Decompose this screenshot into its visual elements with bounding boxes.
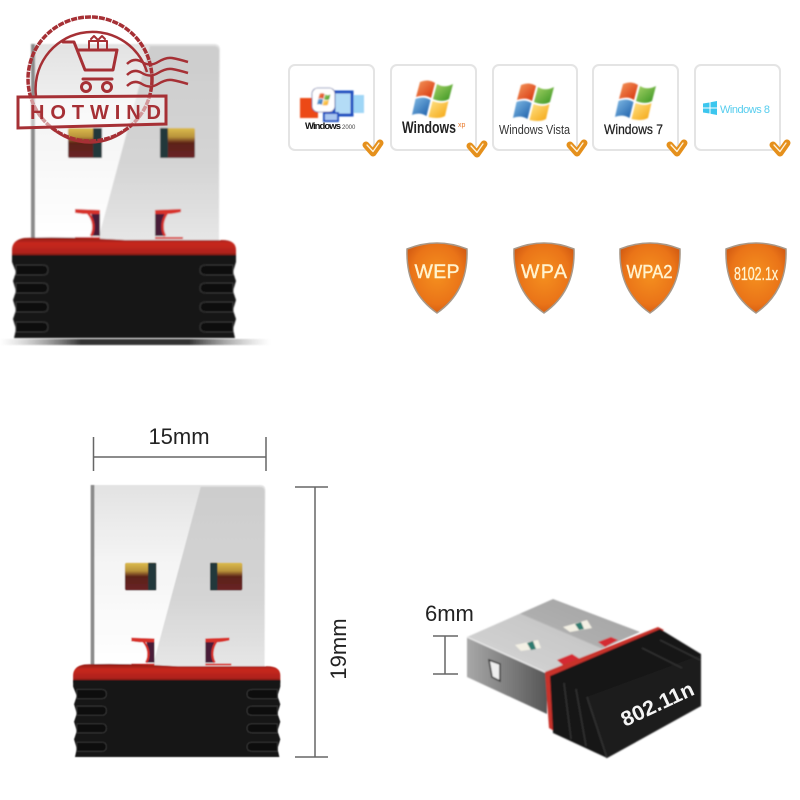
postmark waves — [127, 58, 188, 86]
usb dongle angled view — [467, 599, 701, 758]
side slot — [489, 660, 500, 681]
plug top face — [467, 599, 640, 673]
contact windows — [515, 620, 592, 651]
check mark — [570, 143, 584, 153]
check mark — [670, 143, 684, 153]
icon: shopping cart — [63, 36, 117, 92]
model label 802.11n: 802.11n — [617, 678, 698, 732]
plug side face — [467, 637, 547, 714]
red collar — [545, 627, 664, 732]
top edge highlight — [467, 637, 547, 673]
security badge: wpa2 — [620, 243, 680, 315]
stamp ring — [28, 17, 152, 143]
red clips — [557, 637, 618, 666]
check mark — [366, 143, 380, 153]
width dimension: 15mm — [94, 424, 266, 471]
black housing — [550, 629, 701, 758]
watermark stamp: hotwind — [18, 17, 188, 143]
security badge: wep: WEP — [414, 261, 460, 283]
check mark — [773, 143, 787, 153]
hotwind label: HOTWIND — [30, 102, 161, 124]
hotwind label — [18, 96, 166, 128]
check mark — [470, 144, 484, 154]
os compatibility: windows vista — [493, 65, 577, 150]
height dimension: 19mm: 19mm — [326, 618, 351, 680]
security badge: wpa2: WPA2 — [626, 262, 672, 282]
security badge: wpa: WPA — [521, 261, 567, 283]
usb dongle front view (small) — [73, 485, 280, 757]
os compatibility: windows 7: Windows 7 — [604, 121, 663, 137]
black body — [12, 255, 236, 338]
os compatibility: windows vista: Windows Vista — [499, 122, 571, 137]
red clip right — [155, 209, 183, 239]
metal plug — [31, 44, 220, 240]
height dimension: 19mm — [295, 487, 351, 757]
red clip left — [75, 209, 100, 239]
thickness dimension: 6mm: 6mm — [425, 601, 474, 626]
security badge: wep — [407, 243, 467, 315]
os compatibility: windows xp — [391, 65, 476, 150]
width dimension: 15mm: 15mm — [148, 424, 210, 449]
contact window left — [68, 128, 102, 158]
dongle shadow — [0, 339, 270, 345]
os compatibility: windows xp: Windows — [402, 119, 456, 137]
os compatibility: windows 8: Windows 8 — [720, 104, 770, 116]
os compatibility: windows 2000: Windows — [305, 121, 341, 132]
os compatibility: windows 2000: 2000 — [342, 125, 356, 131]
red collar — [12, 237, 236, 258]
os compatibility: windows 7 — [593, 65, 678, 150]
os compatibility: windows xp: xp — [458, 122, 466, 129]
usb dongle front view (large) — [12, 44, 236, 338]
os compatibility: windows 2000 — [289, 65, 374, 150]
contact window right — [160, 128, 195, 158]
os compatibility: windows 8 — [695, 65, 780, 150]
security badge: 8102.1x: 8102.1x — [734, 264, 778, 284]
security badge: 8102.1x — [726, 243, 786, 315]
security badge: wpa — [514, 243, 574, 315]
thickness dimension: 6mm — [425, 601, 474, 674]
